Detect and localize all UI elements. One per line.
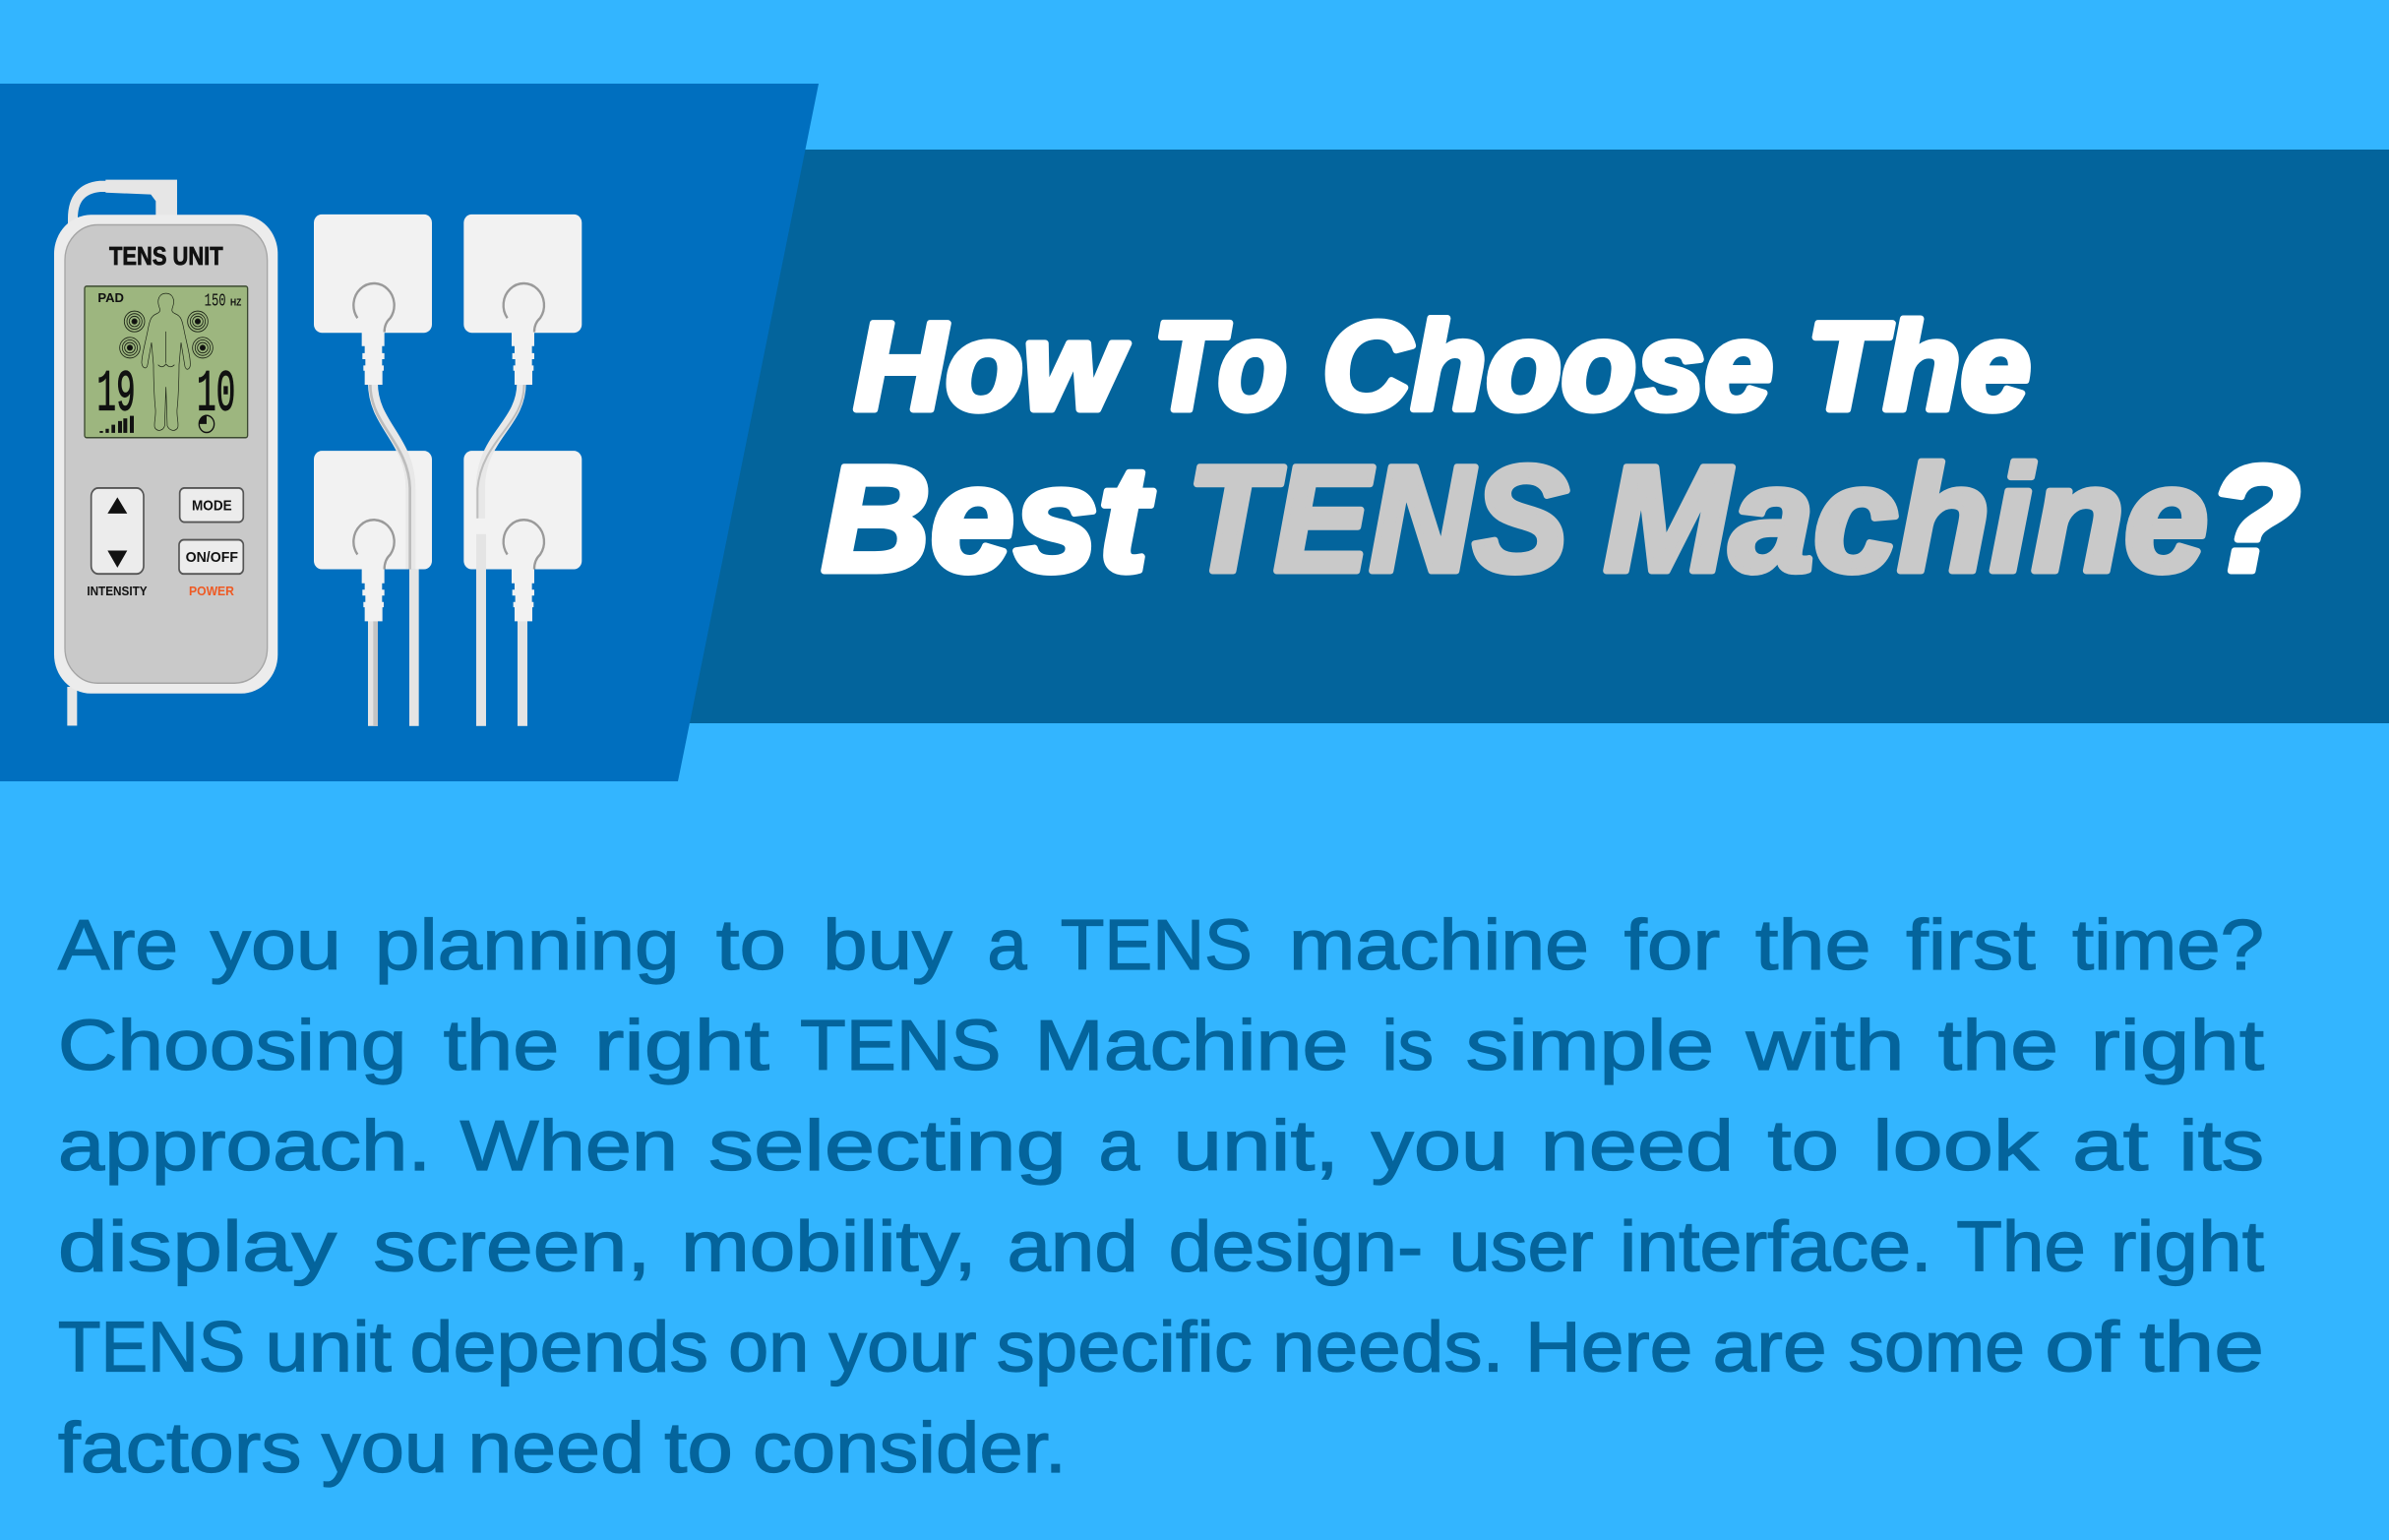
icon: four electrode pads with wires [314, 215, 582, 726]
paragraph line 4 [58, 1206, 2264, 1286]
signal bars [99, 416, 134, 433]
paragraph line 2: right [2091, 1006, 2264, 1085]
mode button [180, 488, 243, 523]
paragraph line 6: need [467, 1408, 644, 1488]
paragraph line 1: planning [375, 905, 680, 985]
icon: TENS unit device [54, 180, 277, 725]
pad zones [120, 311, 213, 358]
paragraph line 5: Here [1525, 1308, 1692, 1387]
intensity label: INTENSITY [87, 584, 148, 598]
paragraph line 2: is [1381, 1006, 1434, 1085]
paragraph line 4: screen, [373, 1206, 650, 1286]
title banner [590, 150, 2389, 723]
paragraph line 3: need [1541, 1106, 1734, 1186]
paragraph line 5: specific [997, 1308, 1253, 1387]
on/off button: ON/OFF [186, 549, 238, 565]
paragraph line 6: to [664, 1408, 733, 1488]
paragraph line 2: with [1745, 1006, 1905, 1085]
paragraph line 3: selecting [708, 1106, 1067, 1186]
paragraph line 2: the [1938, 1006, 2058, 1085]
paragraph line 2 [58, 1006, 2264, 1085]
intensity button [92, 488, 144, 574]
device face [65, 224, 268, 683]
paragraph line 1: to [716, 905, 786, 985]
paragraph line 3: to [1767, 1106, 1839, 1186]
paragraph line 5: your [828, 1308, 977, 1387]
straight lower wires [368, 534, 527, 726]
device label: TENS UNIT [109, 243, 223, 271]
paragraph line 4: interface. [1620, 1206, 1931, 1286]
paragraph line 1: a [987, 905, 1027, 985]
paragraph line 4: user [1449, 1206, 1594, 1286]
paragraph line 5: some [1848, 1308, 2025, 1387]
paragraph line 6: consider. [753, 1408, 1067, 1488]
paragraph line 2: TENS [800, 1006, 1001, 1085]
paragraph line 3: a [1098, 1106, 1140, 1186]
title line 1: To [1153, 296, 1287, 436]
paragraph line 3: you [1372, 1106, 1508, 1186]
lead wire and connector [67, 180, 177, 725]
pad label: PAD [97, 290, 124, 305]
paragraph line 1: Are [58, 905, 178, 985]
paragraph line 2: simple [1466, 1006, 1714, 1085]
paragraph line 3: at [2072, 1106, 2148, 1186]
paragraph line 5 [58, 1308, 2264, 1387]
paragraph line 3: unit, [1173, 1106, 1339, 1186]
paragraph line 1: buy [823, 905, 952, 985]
paragraph line 5: the [2139, 1308, 2264, 1387]
paragraph line 2: Machine [1034, 1006, 1348, 1085]
paragraph line 3 [58, 1106, 2264, 1186]
paragraph line 6: factors [58, 1408, 302, 1488]
paragraph line 4: right [2111, 1206, 2264, 1286]
title line 1: Choose [1322, 296, 1773, 436]
intro paragraph [58, 905, 2264, 1488]
down arrow [107, 551, 127, 568]
paragraph line 1: machine [1289, 905, 1589, 985]
paragraph line 4: mobility, [681, 1206, 977, 1286]
paragraph line 1: TENS [1061, 905, 1253, 985]
paragraph line 1: you [211, 905, 341, 985]
crossing wires [370, 383, 524, 570]
paragraph line 4: design- [1169, 1206, 1423, 1286]
paragraph line 5: needs. [1272, 1308, 1503, 1387]
on/off button [179, 540, 243, 574]
paragraph line 1 [58, 905, 2264, 985]
paragraph line 5: TENS [58, 1308, 245, 1387]
frequency unit: HZ [230, 297, 242, 308]
paragraph line 5: on [728, 1308, 809, 1387]
title line 1: The [1807, 296, 2031, 436]
strain reliefs [362, 332, 534, 621]
paragraph line 5: depends [410, 1308, 708, 1387]
title line 2: Best [822, 435, 1154, 603]
electrode pads [314, 215, 582, 570]
paragraph line 1: for [1624, 905, 1720, 985]
title line 2: TENS [1187, 435, 1568, 603]
mode button: MODE [192, 498, 232, 514]
power label: POWER [189, 584, 234, 598]
left product panel [0, 84, 819, 781]
timer readout: 10 [197, 361, 235, 428]
LCD screen [85, 286, 248, 438]
title [822, 296, 2300, 603]
paragraph line 3: approach. [58, 1106, 431, 1186]
intensity readout: 19 [96, 361, 136, 428]
paragraph line 1: time? [2072, 905, 2264, 985]
device body [54, 215, 277, 694]
paragraph line 3: When [460, 1106, 678, 1186]
paragraph line 2: the [444, 1006, 559, 1085]
paragraph line 1: first [1906, 905, 2036, 985]
title line 2: Machine? [1604, 435, 2300, 603]
title line 1 [854, 296, 2031, 436]
timer icon [199, 415, 214, 433]
paragraph line 5: are [1713, 1308, 1827, 1387]
paragraph line 5: unit [265, 1308, 392, 1387]
paragraph line 2: Choosing [58, 1006, 406, 1085]
paragraph line 4: The [1956, 1206, 2086, 1286]
paragraph line 5: of [2045, 1308, 2120, 1387]
snap connectors [353, 283, 544, 570]
paragraph line 4: and [1008, 1206, 1138, 1286]
paragraph line 6 [58, 1408, 1067, 1488]
up arrow [107, 497, 127, 514]
title line 1: How [854, 296, 1129, 436]
body outline figure [142, 293, 190, 430]
paragraph line 1: the [1755, 905, 1871, 985]
title line 2 [822, 435, 2300, 603]
paragraph line 6: you [322, 1408, 448, 1488]
paragraph line 4: display [58, 1206, 337, 1286]
frequency readout: 150 [205, 291, 226, 312]
paragraph line 3: look [1872, 1106, 2040, 1186]
paragraph line 3: its [2178, 1106, 2264, 1186]
paragraph line 2: right [594, 1006, 769, 1085]
